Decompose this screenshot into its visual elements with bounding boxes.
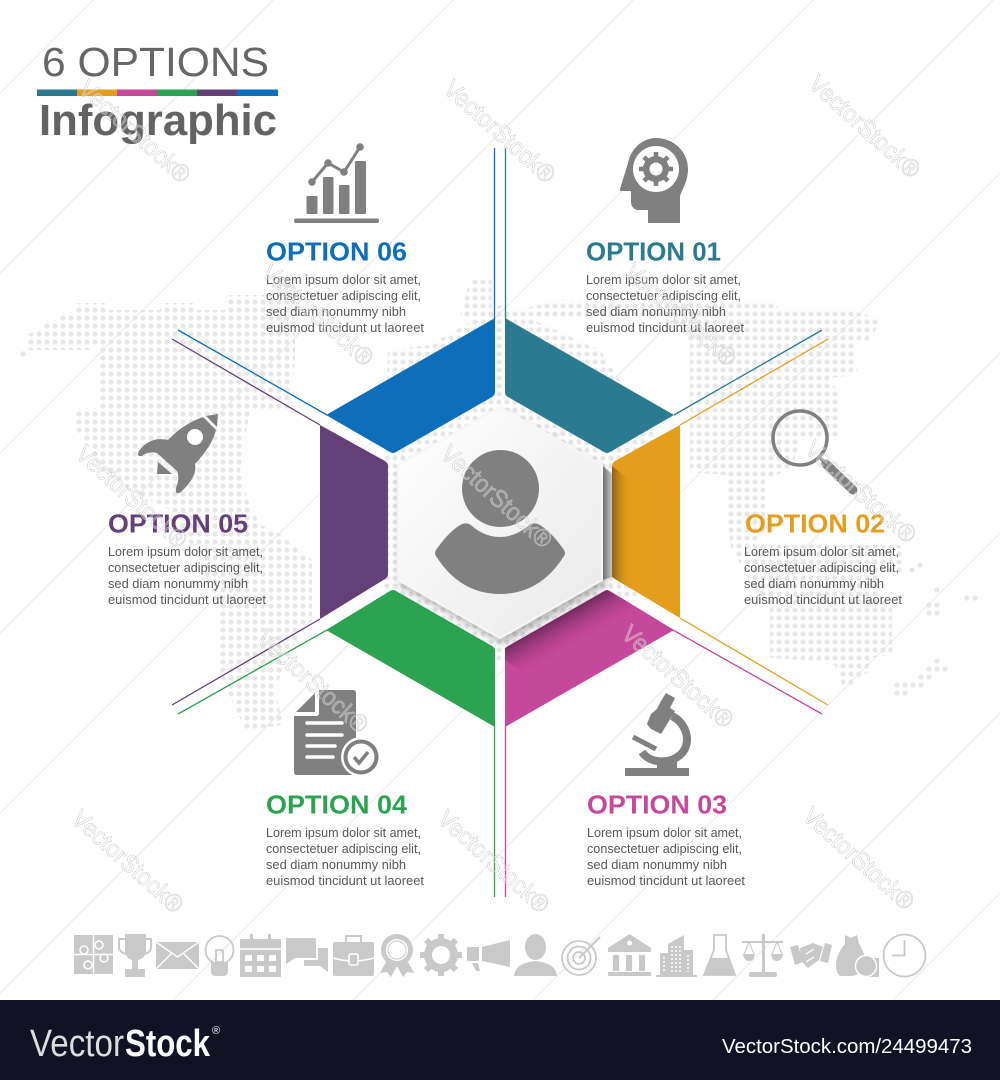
footer logo: Vector <box>30 1023 124 1065</box>
footer url: VectorStock.com/24499473 <box>722 1036 972 1058</box>
icon: target <box>562 937 600 975</box>
icon: magnifier <box>773 411 853 490</box>
dotted world map: americas <box>26 278 312 730</box>
icon: bar chart <box>294 143 379 223</box>
panel: option 01: OPTION 01 <box>586 238 721 266</box>
panel: option 05: OPTION 05 <box>108 510 248 538</box>
icon: calendar <box>240 934 281 977</box>
panel: option 04: euismod tincidunt ut laoreet <box>266 873 424 888</box>
panel: option 03: Lorem ipsum dolor sit amet, <box>587 825 742 840</box>
panel: option 04: Lorem ipsum dolor sit amet, <box>266 825 421 840</box>
panel: option 02 <box>744 411 902 607</box>
segment: option 04 green <box>326 590 495 727</box>
hexagon side shadow <box>603 466 612 580</box>
watermarks: VectorStock® <box>797 802 920 916</box>
icon: scales <box>742 934 783 977</box>
panel: option 06: sed diam nonummy nibh <box>266 304 406 319</box>
panel: option 04: consectetuer adipiscing elit, <box>266 841 421 856</box>
panel: option 04: sed diam nonummy nibh <box>266 857 406 872</box>
watermarks: VectorStock® <box>619 258 742 372</box>
footer logo: Stock <box>125 1023 211 1065</box>
icon: clock <box>884 934 926 976</box>
title: 6 OPTIONS: 6 OPTIONS <box>42 39 269 85</box>
footer logo <box>30 1023 220 1065</box>
panel: option 02: euismod tincidunt ut laoreet <box>744 592 902 607</box>
panel: option 03: euismod tincidunt ut laoreet <box>587 873 745 888</box>
icon: head with gear <box>620 138 688 223</box>
segment: option 03 magenta <box>505 590 674 727</box>
panel: option 02: consectetuer adipiscing elit, <box>744 560 899 575</box>
panel: option 06: Lorem ipsum dolor sit amet, <box>266 272 421 287</box>
panel: option 02: OPTION 02 <box>745 510 885 538</box>
footer logo: ® <box>212 1025 220 1037</box>
panel: option 02: Lorem ipsum dolor sit amet, <box>744 544 899 559</box>
icon: gear <box>420 934 462 976</box>
dotted world map: eurasia and africa <box>460 280 905 690</box>
icon: puzzle <box>74 935 113 974</box>
watermarks: VectorStock® <box>256 258 379 372</box>
watermarks: VectorStock® <box>803 70 926 184</box>
panel: option 05: Lorem ipsum dolor sit amet, <box>108 544 263 559</box>
icon: award ribbon <box>380 934 414 977</box>
watermarks: VectorStock® <box>251 625 374 739</box>
segment: option 02 orange <box>612 425 680 618</box>
footer bar <box>0 1000 1000 1080</box>
icon: person <box>435 450 565 594</box>
watermarks: VectorStock® <box>66 805 189 919</box>
watermarks: VectorStock® <box>432 805 555 919</box>
panel: option 06 <box>266 143 424 335</box>
panel: option 01: euismod tincidunt ut laoreet <box>586 320 744 335</box>
watermarks: VectorStock® <box>799 435 922 549</box>
dotted world map: islands <box>20 351 978 696</box>
panel: option 06: OPTION 06 <box>266 238 407 266</box>
icon: money bag and coin <box>836 935 879 977</box>
watermarks: VectorStock® <box>435 440 558 554</box>
segment: option 01 teal <box>505 318 674 453</box>
icon: microscope <box>625 693 689 776</box>
icon: handshake <box>790 943 832 968</box>
title colour bar <box>37 90 278 96</box>
panel: option 02: sed diam nonummy nibh <box>744 576 884 591</box>
panel: option 04: OPTION 04 <box>266 792 408 820</box>
segment: option 05 purple <box>320 425 388 619</box>
segment: option 06 blue <box>326 318 495 453</box>
centre hexagon <box>398 407 602 638</box>
icon: trophy <box>119 934 151 977</box>
icon: speech bubbles <box>286 938 328 972</box>
watermarks: VectorStock® <box>70 440 193 554</box>
connector lines <box>172 148 828 897</box>
panel: option 05 <box>108 414 266 607</box>
title: Infographic: Infographic <box>39 96 277 145</box>
panel: option 03: OPTION 03 <box>587 792 727 820</box>
icon: buildings <box>656 935 697 977</box>
watermarks: VectorStock® <box>616 620 739 734</box>
dotted world map: central patch <box>380 305 680 660</box>
icon: bank <box>608 934 651 976</box>
panel: option 03 <box>587 693 745 888</box>
watermarks: VectorStock® <box>73 75 196 189</box>
watermarks: VectorStock® <box>438 75 561 189</box>
panel: option 06: consectetuer adipiscing elit, <box>266 288 421 303</box>
panel: option 01: Lorem ipsum dolor sit amet, <box>586 272 741 287</box>
icon row <box>74 934 926 977</box>
panel: option 03: sed diam nonummy nibh <box>587 857 727 872</box>
icon: megaphone <box>467 940 510 971</box>
panel: option 05: consectetuer adipiscing elit, <box>108 560 263 575</box>
watermarks <box>66 70 926 919</box>
panel: option 03: consectetuer adipiscing elit, <box>587 841 742 856</box>
icon: user <box>514 934 557 976</box>
icon: briefcase <box>333 936 374 976</box>
panel: option 01 <box>586 138 744 335</box>
panel: option 05: euismod tincidunt ut laoreet <box>108 592 266 607</box>
icon: document with check <box>294 690 381 777</box>
panel: option 06: euismod tincidunt ut laoreet <box>266 320 424 335</box>
icon: light bulb <box>206 936 234 976</box>
icon: rocket <box>138 414 218 493</box>
panel: option 01: sed diam nonummy nibh <box>586 304 726 319</box>
panel: option 04 <box>266 690 424 888</box>
icon: flask <box>704 935 735 975</box>
panel: option 01: consectetuer adipiscing elit, <box>586 288 741 303</box>
panel: option 05: sed diam nonummy nibh <box>108 576 248 591</box>
icon: envelope <box>156 942 199 969</box>
